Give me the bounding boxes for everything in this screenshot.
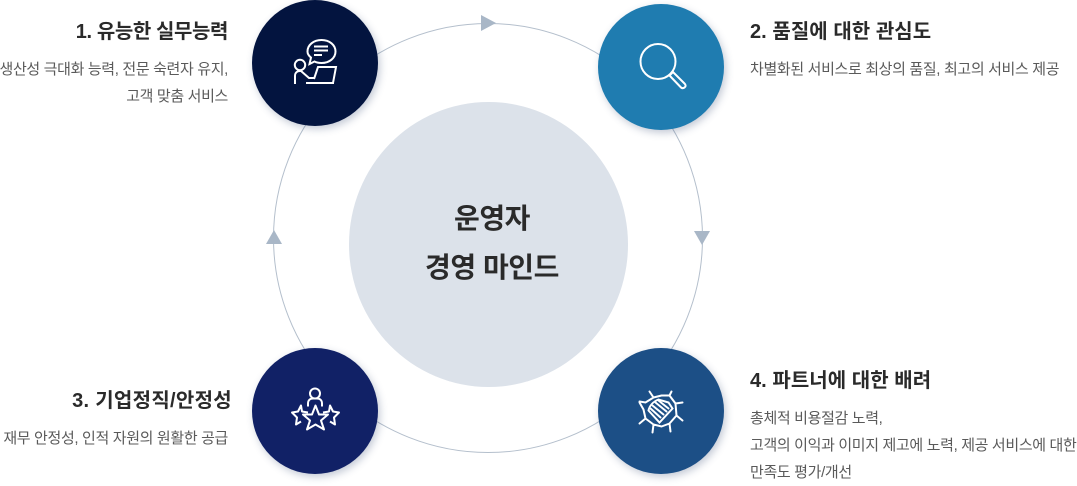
heading 1: 1. 유능한 실무능력 bbox=[76, 21, 228, 43]
description 1: 생산성 극대화 능력, 전문 숙련자 유지, bbox=[0, 61, 228, 78]
description 4: 고객의 이익과 이미지 제고에 노력, 제공 서비스에 대한 bbox=[750, 437, 1076, 454]
center circle bbox=[349, 102, 628, 387]
circle 3 with stars icon bbox=[252, 348, 378, 474]
heading 4: 4. 파트너에 대한 배려 bbox=[750, 370, 931, 392]
center title bbox=[425, 203, 559, 283]
arrow: right bbox=[694, 231, 710, 245]
heading 2: 2. 품질에 대한 관심도 bbox=[750, 21, 931, 43]
description 1: 고객 맞춤 서비스 bbox=[126, 88, 228, 105]
description 4: 총체적 비용절감 노력, bbox=[750, 410, 883, 427]
description 1 bbox=[0, 61, 228, 105]
center title: 경영 마인드 bbox=[425, 252, 559, 283]
center title: 운영자 bbox=[454, 203, 530, 234]
circle 2 with magnifier icon bbox=[598, 4, 724, 130]
description 4 bbox=[750, 410, 1076, 481]
description 4: 만족도 평가/개선 bbox=[750, 464, 852, 481]
description 2: 차별화된 서비스로 최상의 품질, 최고의 서비스 제공 bbox=[750, 61, 1059, 78]
circle 1 with person icon bbox=[252, 0, 378, 126]
arrow: top bbox=[481, 15, 496, 31]
circle 4 with handshake icon bbox=[598, 348, 724, 474]
heading 3: 3. 기업정직/안정성 bbox=[72, 390, 232, 412]
description 3: 재무 안정성, 인적 자원의 원활한 공급 bbox=[3, 430, 228, 447]
arrow: left bbox=[266, 230, 282, 244]
